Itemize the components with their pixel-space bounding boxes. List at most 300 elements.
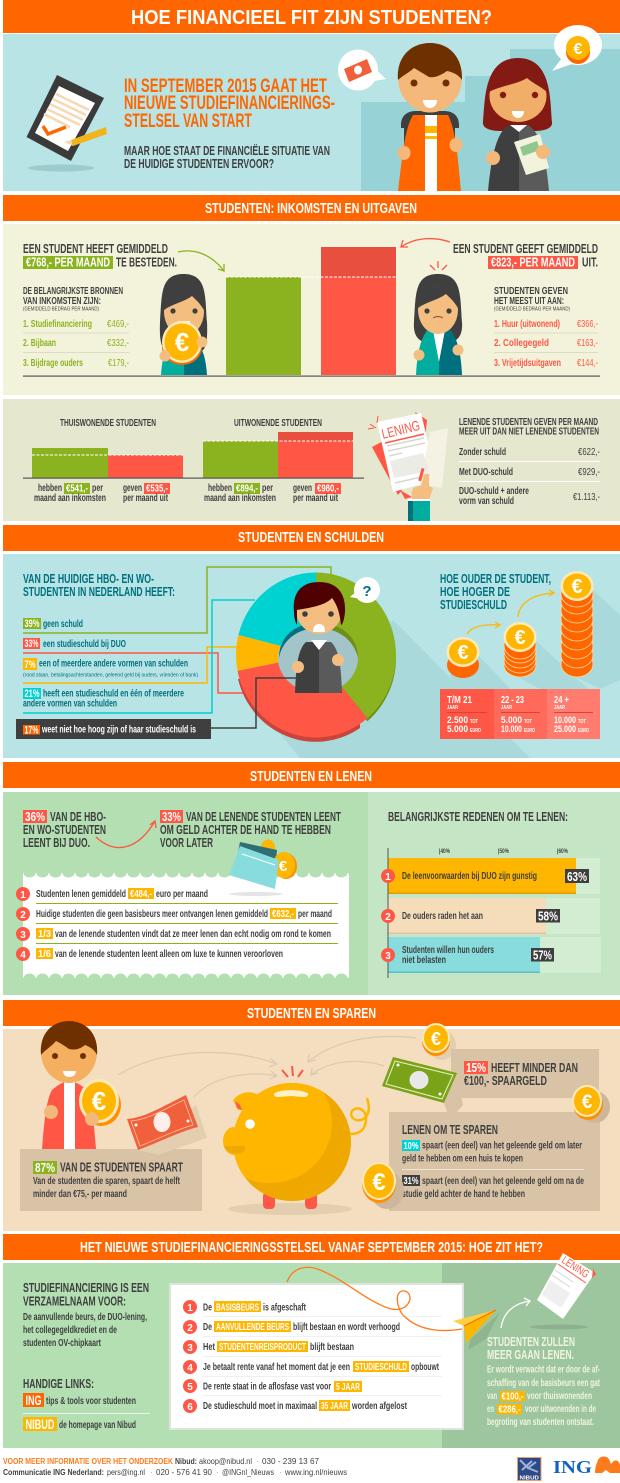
table: borrowing students spend more xyxy=(459,417,600,507)
icon: loan papers in hand xyxy=(368,412,448,521)
expenses heading: €823,- PER MAAND xyxy=(491,254,575,270)
text block: links: tips & tools voor studenten xyxy=(46,1396,136,1407)
panel: redenen om te lenen xyxy=(368,792,620,995)
debt heading: STUDENTEN IN NEDERLAND HEEFT: xyxy=(23,584,175,599)
callout: lenen om te sparen: 31% xyxy=(404,1176,419,1187)
icon: speech bubble with coin xyxy=(552,25,602,71)
age heading xyxy=(440,571,551,612)
coin stack small xyxy=(446,637,480,678)
income sources: (GEMIDDELD BEDRAG PER MAAND) xyxy=(23,306,99,312)
callout: lenen om te sparen xyxy=(389,1112,600,1211)
callout: lenen om te sparen: studie geld achter de hand te hebben xyxy=(402,1189,525,1200)
bar 58% xyxy=(388,898,600,934)
item 3: Het xyxy=(203,1342,215,1353)
expense categories: HET MEEST UIT AAN: xyxy=(494,295,564,307)
footer: contact: · xyxy=(279,1468,282,1477)
text block: meer lenen: €286,- xyxy=(498,1404,520,1416)
item 1: is afgeschaft xyxy=(263,1302,306,1314)
labels thuiswonend expenses xyxy=(123,483,170,504)
income sources: 3. Bijdrage ouders xyxy=(23,358,83,369)
list item 3: 1/3 xyxy=(38,929,51,940)
legend: 7%: (rood staan, betalingsachterstanden, geleend geld bij ouders, vrienden of bank) xyxy=(23,672,198,678)
coin stack medium: € xyxy=(514,627,526,649)
labels uitwonend expenses: €980,- xyxy=(317,484,339,494)
legend: 7% xyxy=(23,658,198,678)
labels thuiswonend expenses: per maand uit xyxy=(123,493,168,504)
table: borrowing students spend more: €622,- xyxy=(578,447,600,458)
intro heading: NIEUWE STUDIEFINANCIERINGS- xyxy=(124,93,335,114)
income sources xyxy=(23,285,129,369)
item 2: De xyxy=(203,1322,212,1333)
callout: 87%: Van de studenten die sparen, spaart de helft xyxy=(33,1176,180,1187)
statement 36%: VAN DE HBO- xyxy=(50,809,106,824)
item 3: STUDENTENREISPRODUCT xyxy=(219,1342,306,1353)
panel: intro xyxy=(3,25,620,191)
intro question: MAAR HOE STAAT DE FINANCIËLE SITUATIE VAN xyxy=(124,143,330,158)
arrows to piggy bank xyxy=(118,1036,416,1097)
expenses heading: UIT. xyxy=(582,254,598,270)
text block: meer lenen: van xyxy=(487,1391,497,1402)
icon: loan papers in hand: LENING xyxy=(380,417,422,442)
footer: contact: · xyxy=(256,1457,259,1466)
table: debt by age: 22 - 23 xyxy=(501,695,524,706)
list item 2: Huidige studenten die geen basisbeurs meer ontvangen lenen gemiddeld xyxy=(36,909,268,920)
expense categories: €163,- xyxy=(577,338,598,349)
income sources: €179,- xyxy=(108,358,129,369)
legend: 21%: 21% xyxy=(24,688,40,700)
list item 1: 1 xyxy=(20,890,26,901)
table: debt by age: JAAR xyxy=(554,705,565,711)
coin stack large: € xyxy=(571,576,583,598)
bar 63%: De leenvoorwaarden bij DUO zijn gunstig xyxy=(402,871,537,882)
callout: 87% xyxy=(20,1149,202,1211)
text block: links: de homepage van Nibud xyxy=(59,1420,136,1431)
bar 63%: 63% xyxy=(567,869,587,884)
statement 33%: VAN DE LENENDE STUDENTEN LEENT xyxy=(186,809,341,824)
item 1: BASISBEURS xyxy=(216,1302,259,1314)
bar chart: income versus expenses xyxy=(23,247,600,377)
expense categories: 2. Collegegeld xyxy=(494,338,549,349)
icon: coin top: € xyxy=(431,1029,441,1049)
table: debt by age: EURO xyxy=(578,728,589,734)
list item 2: €632,- xyxy=(272,909,294,920)
expense categories: STUDENTEN GEVEN xyxy=(494,285,568,297)
white list panel xyxy=(170,1284,463,1429)
bar 57%: niet belasten xyxy=(402,955,446,966)
table: debt by age: EURO xyxy=(470,728,481,734)
intro heading xyxy=(124,76,335,132)
legend: 17%: weet niet hoe hoog zijn of haar studieschuld is xyxy=(41,724,196,736)
legend: 33%: 33% xyxy=(24,638,39,650)
income sources: 1. Studiefinanciering xyxy=(23,319,92,330)
debt heading xyxy=(23,571,175,599)
icon: piggy bank xyxy=(223,1066,370,1215)
item 6 xyxy=(183,1399,407,1413)
list item 3: 3 xyxy=(20,930,26,941)
axis labels: |40% xyxy=(439,849,451,855)
item 4: 4 xyxy=(187,1363,193,1374)
icon: wallet with coins xyxy=(229,840,297,889)
expense categories xyxy=(494,285,598,369)
footer: contact: · xyxy=(150,1468,153,1477)
speech bubble question xyxy=(350,577,380,603)
table: debt by age: 10.000 xyxy=(554,715,576,725)
income sources: DE BELANGRIJKSTE BRONNEN xyxy=(23,285,123,297)
text block: links: NIBUD xyxy=(26,1416,54,1432)
item 5: 5 JAAR xyxy=(336,1382,361,1393)
item 1 xyxy=(183,1300,306,1314)
item 3 xyxy=(183,1340,354,1354)
list item 2 xyxy=(16,907,332,921)
age heading: HOE HOGER DE xyxy=(440,584,510,599)
text block: links xyxy=(23,1376,150,1432)
list item 4: 4 xyxy=(20,950,26,961)
text block: studiefinanciering: STUDIEFINANCIERING IS EEN xyxy=(23,1280,149,1295)
item 5 xyxy=(183,1379,362,1393)
panel: nieuwe stelsel xyxy=(3,1246,620,1448)
text block: studiefinanciering: studenten OV-chipkaart xyxy=(23,1338,101,1349)
statement 33% xyxy=(160,809,341,850)
expense categories: 3. Vrijetijdsuitgaven xyxy=(494,358,561,369)
table: debt by age: JAAR xyxy=(501,705,512,711)
table: borrowing students spend more: vorm van schuld xyxy=(459,496,514,507)
arrows between stacks xyxy=(467,590,554,634)
axis labels: |60% xyxy=(557,849,569,855)
footer: contact: 030 - 239 13 67 xyxy=(262,1457,320,1466)
heading: lenen: STUDENTEN EN LENEN xyxy=(250,768,372,785)
boy student xyxy=(398,43,462,191)
labels uitwonend income: per xyxy=(262,483,273,494)
item 6: worden afgelost xyxy=(351,1401,407,1412)
income sources: 2. Bijbaan xyxy=(23,338,56,349)
item 4: Je betaalt rente vanaf het moment dat je een xyxy=(203,1362,350,1373)
icon: speech bubble with banknote xyxy=(338,50,386,90)
labels uitwonend expenses: geven xyxy=(293,483,312,494)
labels uitwonend income: €894,- xyxy=(236,484,258,494)
bar 57%: 57% xyxy=(533,948,552,962)
bar chart: thuiswonende studenten xyxy=(32,418,183,478)
callout: 15%: 15% xyxy=(466,1060,486,1075)
icon: paper plane xyxy=(453,1310,500,1350)
expense categories: €366,- xyxy=(577,319,598,330)
legend: 7%: een of meerdere andere vormen van schulden xyxy=(39,658,188,670)
logo: Nibud xyxy=(518,1458,541,1482)
table: debt by age: 2.500 xyxy=(447,715,468,725)
coin stack small: € xyxy=(457,642,469,664)
callout: 87%: VAN DE STUDENTEN SPAART xyxy=(60,1160,183,1174)
list item 3: van de lenende studenten vindt dat ze meer lenen dan echt nodig om rond te komen xyxy=(55,929,331,940)
icon: coin top xyxy=(422,1023,456,1060)
labels thuiswonend income: €541,- xyxy=(66,484,88,494)
footer: contact: Communicatie ING Nederland: xyxy=(3,1468,104,1477)
labels thuiswonend income: hebben xyxy=(38,483,62,494)
labels thuiswonend income: maand aan inkomsten xyxy=(34,493,106,504)
text block: meer lenen: en xyxy=(487,1404,494,1415)
text block: meer lenen xyxy=(487,1334,600,1428)
labels thuiswonend expenses: geven xyxy=(123,483,142,494)
item 2: blijft bestaan en wordt verhoogd xyxy=(293,1322,400,1333)
item 3: 3 xyxy=(187,1343,193,1354)
legend: 33%: een studieschuld bij DUO xyxy=(43,639,126,650)
bar chart: uitwonende studenten xyxy=(203,418,353,478)
heading: schulden xyxy=(3,525,620,551)
item 6: 35 JAAR xyxy=(321,1401,349,1412)
text block: studiefinanciering: het collegegeldkrediet en de xyxy=(23,1325,117,1336)
donut chart xyxy=(236,572,396,742)
income heading: TE BESTEDEN. xyxy=(116,254,177,270)
statement 36%: LEENT BIJ DUO. xyxy=(23,835,90,850)
arrow: income xyxy=(178,251,224,271)
footer: contact: 020 - 576 41 90 xyxy=(156,1468,213,1477)
legend: 21% xyxy=(23,688,184,710)
list item 1: Studenten lenen gemiddeld xyxy=(36,889,126,900)
item 6: De studieschuld moet in maximaal xyxy=(203,1401,317,1412)
icon: lening paper xyxy=(530,1246,596,1330)
intro question: DE HUIDIGE STUDENTEN ERVOOR? xyxy=(124,156,274,171)
table: debt by age: TOT xyxy=(578,719,586,725)
income heading: €768,- PER MAAND xyxy=(26,254,110,270)
income sources: €332,- xyxy=(107,338,129,349)
intro heading: IN SEPTEMBER 2015 GAAT HET xyxy=(124,76,327,97)
bar 58%: 58% xyxy=(538,908,558,924)
coin stack large xyxy=(560,571,594,677)
paper plane trail xyxy=(287,1267,462,1331)
panel: schulden xyxy=(3,554,620,758)
bar 63% xyxy=(388,858,600,894)
icon: coin bottom xyxy=(362,1162,404,1209)
list item 1 xyxy=(16,887,208,901)
table: debt by age: 5.000 xyxy=(501,715,522,725)
callout: lenen om te sparen: 10% xyxy=(404,1141,419,1152)
table: borrowing students spend more: €1.113,- xyxy=(573,492,600,503)
heading: sparen: STUDENTEN EN SPAREN xyxy=(247,1005,376,1022)
footer: contact xyxy=(3,1457,347,1477)
dark connector xyxy=(211,678,296,728)
item 2: 2 xyxy=(187,1323,193,1334)
legend: 39% xyxy=(23,618,83,630)
item 3: blijft bestaan xyxy=(310,1342,354,1353)
table: borrowing students spend more: Met DUO-schuld xyxy=(459,467,513,478)
receipt panel xyxy=(23,840,349,983)
list item 2: 2 xyxy=(20,910,26,921)
girl student xyxy=(483,58,552,191)
arrow: white xyxy=(501,1298,530,1328)
heading: nieuwe stelsel xyxy=(3,1234,620,1260)
icon: clipboard with pencil xyxy=(26,75,107,172)
rank markers: 3 xyxy=(385,951,391,962)
labels uitwonend income: maand aan inkomsten xyxy=(204,493,276,504)
list item 4: 1/6 xyxy=(38,949,51,960)
bar 57% xyxy=(388,937,601,973)
axis labels: |50% xyxy=(498,849,510,855)
statement 36%: EN WO-STUDENTEN xyxy=(23,822,106,837)
table: debt by age: 25.000 xyxy=(554,724,576,734)
expense categories: 1. Huur (uitwonend) xyxy=(494,319,560,330)
coin stack medium xyxy=(504,622,536,677)
table: debt by age: JAAR xyxy=(447,705,458,711)
icon: coin bottom: € xyxy=(372,1169,386,1196)
text block: meer lenen: MEER GAAN LENEN. xyxy=(487,1347,574,1362)
title xyxy=(3,0,620,33)
connector lines xyxy=(23,567,331,713)
rank markers: 2 xyxy=(385,912,391,923)
list item 4: van de lenende studenten leent alleen om luxe te kunnen veroorloven xyxy=(55,949,283,960)
item 1: 1 xyxy=(187,1303,193,1314)
footer: contact: Nibud: xyxy=(175,1457,197,1466)
labels thuiswonend income xyxy=(34,483,106,504)
rank markers xyxy=(381,869,395,962)
footer: contact: VOOR MEER INFORMATIE OVER HET ONDERZOEK xyxy=(3,1457,173,1466)
icon: lening paper: LENING xyxy=(559,1254,591,1281)
legend: 21%: andere vormen van schulden xyxy=(23,698,117,710)
text block: meer lenen: STUDENTEN ZULLEN xyxy=(487,1334,575,1349)
income sources: VAN INKOMSTEN ZIJN: xyxy=(23,295,101,307)
heading: inkomsten en uitgaven xyxy=(3,195,620,221)
heading: lenen xyxy=(3,762,620,788)
panel: sparen xyxy=(3,1021,620,1231)
statement 33%: 33% xyxy=(162,809,181,824)
callout: 15%: €100,- SPAARGELD xyxy=(464,1073,547,1088)
legend: 17%: 17% xyxy=(24,724,39,736)
income heading xyxy=(23,241,177,270)
girl with coin: € xyxy=(175,327,189,357)
table: debt by age: 5.000 xyxy=(447,724,468,734)
boy with coin: € xyxy=(92,1086,106,1116)
statement 36%: 36% xyxy=(25,809,45,824)
list item 1: euro per maand xyxy=(156,889,208,900)
text block: links: ING xyxy=(26,1392,42,1408)
list item 4 xyxy=(16,947,283,961)
table: borrowing students spend more: Zonder schuld xyxy=(459,447,506,458)
logo: ING xyxy=(553,1456,620,1477)
icon: coin right xyxy=(572,1085,610,1123)
speech bubble question: ? xyxy=(362,583,372,600)
labels thuiswonend expenses: €535,- xyxy=(146,484,168,494)
item 2 xyxy=(183,1320,400,1334)
intro heading: STELSEL VAN START xyxy=(124,111,252,132)
callout: 87%: 87% xyxy=(35,1160,55,1175)
girl with coin xyxy=(160,274,208,375)
axis labels xyxy=(439,849,569,855)
statement 36% xyxy=(23,809,106,850)
heading: inkomsten en uitgaven: STUDENTEN: INKOMSTEN EN UITGAVEN xyxy=(205,200,417,217)
text block: studiefinanciering: VERZAMELNAAM VOOR: xyxy=(23,1294,126,1308)
heading: sparen xyxy=(3,1000,620,1026)
item 6: 6 xyxy=(187,1402,193,1413)
rank markers: 1 xyxy=(385,872,391,883)
legend: 21%: heeft een studieschuld en één of meerdere xyxy=(43,688,184,700)
bar chart: uitwonende studenten: UITWONENDE STUDENTEN xyxy=(234,418,322,429)
item 5: 5 xyxy=(187,1382,193,1393)
labels uitwonend expenses xyxy=(293,483,341,504)
labels uitwonend expenses: per maand uit xyxy=(293,493,338,504)
legend: 17% xyxy=(16,719,211,739)
table: debt by age: T/M 21 xyxy=(447,695,472,706)
title: HOE FINANCIEEL FIT ZIJN STUDENTEN? xyxy=(131,7,492,29)
table: debt by age: TOT xyxy=(524,719,532,725)
logo: ING: ING xyxy=(553,1457,592,1477)
labels thuiswonend income: per xyxy=(92,483,103,494)
bar 57%: Studenten willen hun ouders xyxy=(402,945,494,956)
item 4: opbouwt xyxy=(411,1362,439,1373)
debt heading: VAN DE HUIDIGE HBO- EN WO- xyxy=(23,571,154,586)
table: debt by age: EURO xyxy=(524,728,535,734)
intro question xyxy=(124,143,330,171)
coin stack shadows xyxy=(450,590,620,720)
arrow: red xyxy=(96,821,156,848)
panel: lenen links xyxy=(3,792,368,995)
item 2: AANVULLENDE BEURS xyxy=(216,1322,289,1333)
callout: lenen om te sparen: LENEN OM TE SPAREN xyxy=(402,1122,498,1137)
footer: contact: www.ing.nl/nieuws xyxy=(284,1468,347,1477)
callout: 15%: HEEFT MINDER DAN xyxy=(491,1060,578,1075)
text block: meer lenen: €100,- xyxy=(502,1392,524,1402)
list item 1: €484,- xyxy=(130,889,152,900)
logo: Nibud: NIBUD xyxy=(520,1476,539,1482)
footer: contact: · xyxy=(216,1468,219,1477)
expense categories: (GEMIDDELD BEDRAG PER MAAND) xyxy=(494,306,570,312)
footer: contact: akoop@nibud.nl xyxy=(199,1457,252,1466)
table: debt by age: 24 + xyxy=(554,695,569,706)
worried girl xyxy=(414,261,464,375)
statement 33%: OM GELD ACHTER DE HAND TE HEBBEN xyxy=(160,822,331,837)
item 4: STUDIESCHULD xyxy=(355,1362,407,1373)
footer: contact: @INGnl_Nieuws xyxy=(222,1468,274,1477)
text block: studiefinanciering: De aanvullende beurs, de DUO-lening, xyxy=(23,1312,147,1323)
legend: 7%: 7% xyxy=(24,659,36,671)
boy with coin xyxy=(41,1021,121,1149)
labels uitwonend income: hebben xyxy=(208,483,232,494)
panel: thuiswonend, uitwonend en lenen xyxy=(3,399,620,521)
text block: links: HANDIGE LINKS: xyxy=(23,1376,94,1391)
bar 58%: De ouders raden het aan xyxy=(402,911,483,922)
expenses heading xyxy=(453,241,598,270)
list item 3 xyxy=(16,927,331,941)
callout: 15% xyxy=(451,1049,599,1098)
table: debt by age xyxy=(440,689,600,739)
statement 33%: VOOR LATER xyxy=(160,835,213,850)
icon: coin right: € xyxy=(582,1092,593,1113)
footer: contact: pers@ing.nl xyxy=(107,1468,145,1477)
legend: 33% xyxy=(23,638,126,650)
callout: lenen om te sparen: geld te hebben om een huis te kopen xyxy=(402,1154,523,1164)
table: debt by age: TOT xyxy=(470,719,478,725)
table: borrowing students spend more: DUO-schuld + andere xyxy=(459,486,529,497)
income heading: EEN STUDENT HEEFT GEMIDDELD xyxy=(23,241,168,256)
expense categories: €144,- xyxy=(577,358,598,369)
icon: red banknote xyxy=(127,1095,207,1155)
list item 2: per maand xyxy=(298,909,332,920)
item 5: De rente staat in de aflosfase vast voor xyxy=(203,1382,331,1392)
heading: schulden: STUDENTEN EN SCHULDEN xyxy=(238,529,384,546)
table: borrowing students spend more: €929,- xyxy=(578,467,600,478)
bar chart: thuiswonende studenten: THUISWONENDE STUDENTEN xyxy=(60,418,156,429)
legend: 39%: geen schuld xyxy=(43,619,83,630)
worried student in donut xyxy=(292,582,345,693)
item 4 xyxy=(183,1360,439,1374)
text block: studiefinanciering xyxy=(23,1280,149,1349)
income sources: €469,- xyxy=(107,319,129,330)
icon: green banknote xyxy=(382,1057,463,1120)
labels uitwonend income xyxy=(204,483,276,504)
callout: 87%: minder dan €75,- per maand xyxy=(33,1189,127,1200)
arrow: expenses xyxy=(401,239,450,247)
age heading: STUDIESCHULD xyxy=(440,597,507,612)
icon: wallet with coins: € xyxy=(279,858,288,875)
item 1: De xyxy=(203,1302,212,1314)
icon: speech bubble with coin: € xyxy=(574,41,583,58)
age heading: HOE OUDER DE STUDENT, xyxy=(440,571,551,586)
